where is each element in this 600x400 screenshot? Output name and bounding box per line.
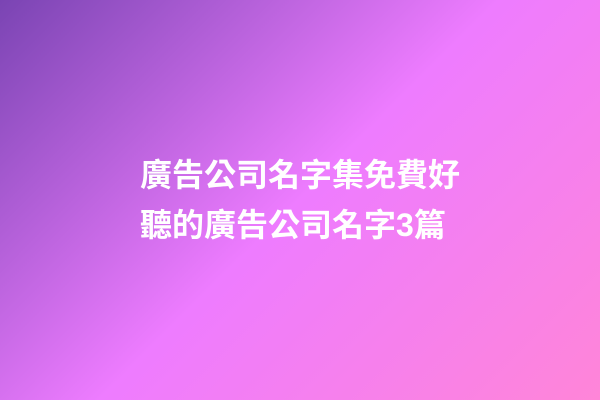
title [140, 157, 460, 243]
title: 聽的廣告公司名字3篇 [140, 207, 446, 243]
title: 廣告公司名字集免費好 [140, 157, 460, 193]
